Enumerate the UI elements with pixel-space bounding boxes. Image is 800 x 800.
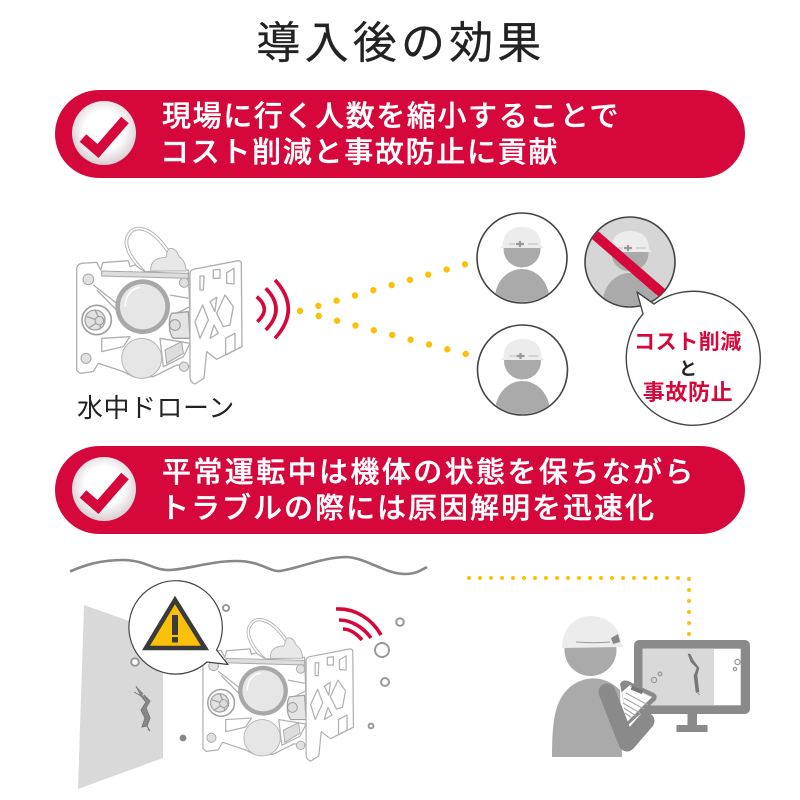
icon: wireless signal (336, 609, 381, 640)
operator (552, 616, 657, 757)
monitor (634, 640, 750, 732)
helmet (562, 616, 623, 648)
bubbles on screen (651, 659, 740, 683)
water surface (70, 557, 427, 574)
worker: lower (478, 325, 568, 416)
icon: check mark (72, 101, 136, 165)
dotted line: to upper worker (300, 264, 466, 311)
label: underwater drone: 水中ドローン (77, 393, 235, 423)
body (552, 678, 622, 757)
clipboard (620, 680, 657, 725)
head (564, 624, 616, 676)
worker: upper (477, 213, 567, 304)
icon: drone with alert (203, 620, 353, 761)
icon: check mark (72, 457, 136, 521)
callout: cost reduction and accident prevention (626, 291, 760, 425)
banner text: コスト削減と事故防止に貢献 (160, 136, 559, 169)
bubbles (131, 605, 404, 740)
banner text: 平常運転中は機体の状態を保ちながら (162, 456, 696, 489)
icon: underwater drone (77, 229, 242, 384)
callout: cost reduction and accident prevention: と (679, 359, 697, 379)
worker: removed (585, 217, 675, 308)
banner text (160, 456, 696, 525)
icon: signal waves (257, 280, 288, 338)
prohibition strap (595, 235, 662, 293)
callout: cost reduction and accident prevention: コスト削減 (634, 330, 742, 354)
banner text: トラブルの際には原因解明を迅速化 (160, 492, 656, 525)
crack on screen (688, 654, 700, 695)
dotted line: signal to monitor (469, 578, 689, 635)
title: 導入後の効果 (256, 19, 546, 68)
callout: cost reduction and accident prevention: 事故防止 (643, 380, 733, 405)
banner: monitoring (55, 446, 745, 534)
cracked wall (78, 605, 163, 789)
banner text (160, 100, 620, 169)
icon: warning triangle (146, 600, 205, 648)
dotted line: to lower worker (319, 316, 466, 354)
banner: reduce staff (55, 90, 745, 178)
banner text: 現場に行く人数を縮小することで (162, 100, 620, 133)
crack (134, 686, 150, 731)
callout: warning (129, 581, 228, 674)
arm (607, 692, 646, 743)
